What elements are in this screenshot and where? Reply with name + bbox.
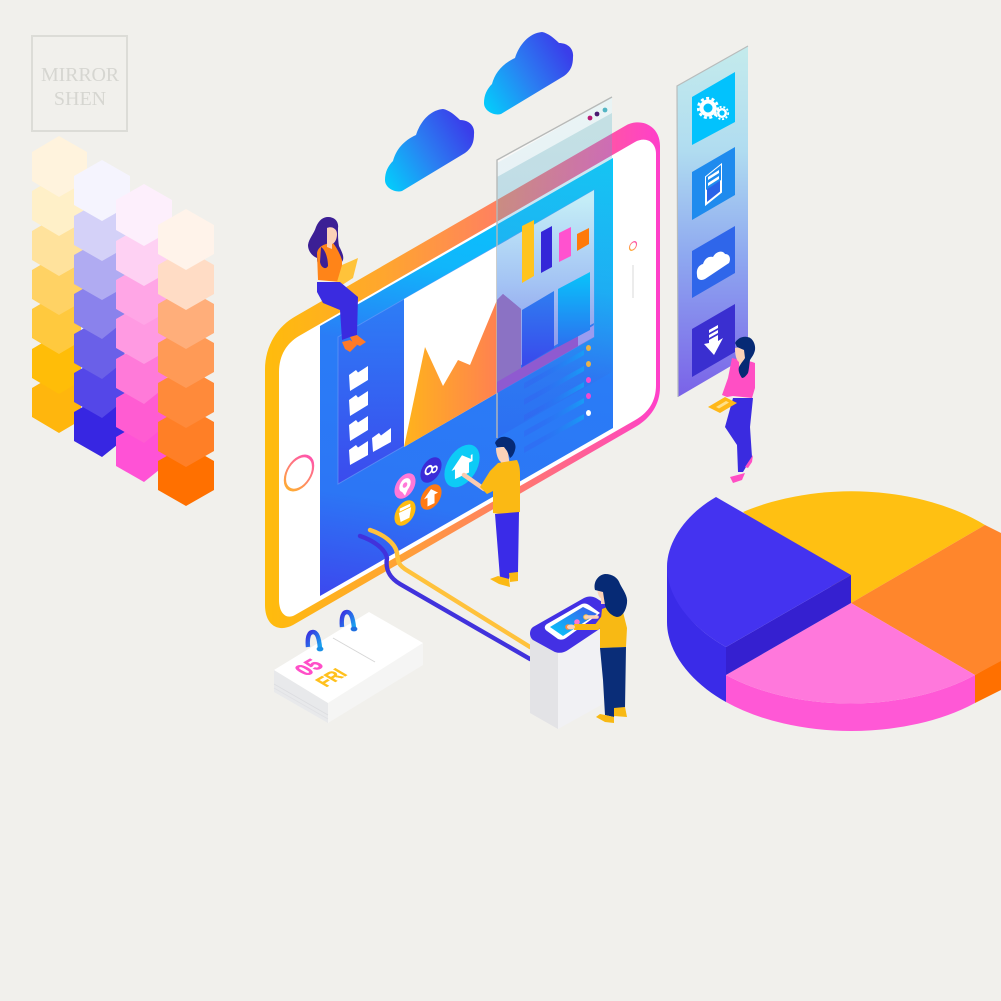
chart peak through glass [497,294,594,393]
shoes [342,340,357,352]
calendar top face [274,612,423,703]
calendar ring right [342,612,354,628]
hair [595,574,627,617]
kiosk top [530,596,610,653]
camera ring [629,240,637,252]
torso [722,358,755,398]
glass edge [497,97,612,438]
calendar left side [274,670,328,723]
hair [308,217,343,268]
colour swatch column: yellow [32,136,87,433]
tablet device [265,122,660,628]
legs [317,282,358,340]
tile: settings gears [692,72,735,145]
tile: document [692,147,735,220]
slice inner side: blue [726,575,851,675]
person: girl with document [708,337,755,483]
tile: cloud [692,226,735,298]
legs [725,398,753,472]
slice side: orange [975,660,1001,703]
slice: blue raised [667,497,851,647]
slice: pink [726,603,975,704]
home button ring [285,451,313,495]
glass title bar [497,97,612,177]
shoes [490,576,510,587]
kiosk terminal [530,596,610,729]
face [597,584,606,604]
calendar date: 05 [289,656,330,679]
inner dashboard panel [338,190,594,484]
blue tile right [558,272,590,347]
app icon buttons [394,438,480,530]
cloud: left [385,109,474,191]
kiosk screen frame [545,604,600,640]
toolbar pane [677,46,748,397]
watermark: Mirror Shen: MIRROR [41,64,120,86]
icon: location pin [394,469,416,503]
person: sitting girl with laptop [308,217,366,352]
tall toolbar panel [677,46,748,397]
shoes [596,714,614,723]
shoes [730,473,745,483]
colour swatch column: indigo [74,160,130,457]
person: girl at kiosk [567,574,627,723]
tile: download arrow [692,304,735,377]
slice: orange [851,525,1001,675]
folder icons [349,366,391,465]
document [708,397,737,413]
slice outer side: blue [667,560,726,702]
chart white background [404,246,497,447]
tablet screen [320,158,613,596]
toolbar edge [677,46,748,397]
calendar [274,612,423,723]
icon: basket [394,496,416,530]
icon: home [444,438,480,494]
calendar right side [328,643,423,723]
laptop [337,258,358,287]
face and neck [496,446,510,466]
glass chart field [497,190,594,379]
speaker slot [632,265,634,298]
legs [495,512,519,579]
arm [574,618,604,627]
cloud: right [484,32,573,114]
kiosk screen [550,607,597,636]
hair lock [320,247,328,268]
icon: up arrow [420,480,442,514]
forearm [464,475,484,489]
watermark: Mirror Shen [32,36,127,131]
bar chart [522,220,589,283]
icon: gears link [420,453,442,487]
glass app window [497,97,612,453]
legs [600,647,626,717]
torso and sleeve [480,460,520,515]
calendar day: FRI [311,666,352,690]
blue tile left [522,291,554,367]
kiosk body right face [558,628,603,729]
person: man touching screen [464,437,520,587]
area chart [404,300,497,447]
watermark: Mirror Shen: SHEN [54,88,106,110]
face [327,227,337,249]
glass pane [497,97,612,438]
kiosk body left face [530,637,558,729]
colour swatch column: pink [116,184,172,482]
hair [495,437,516,458]
slice: yellow [743,491,985,603]
slice side: pink [726,675,975,731]
pie chart [667,491,1001,731]
hair [735,337,755,378]
face [735,346,746,368]
colour swatch column: orange [158,209,214,506]
torso [600,606,627,648]
tablet white face [279,140,656,617]
calendar ring left [308,632,320,648]
torso [317,243,342,282]
connecting cables [360,530,530,659]
tablet bezel [265,122,660,628]
window dots [588,108,607,120]
list rows [524,345,591,453]
